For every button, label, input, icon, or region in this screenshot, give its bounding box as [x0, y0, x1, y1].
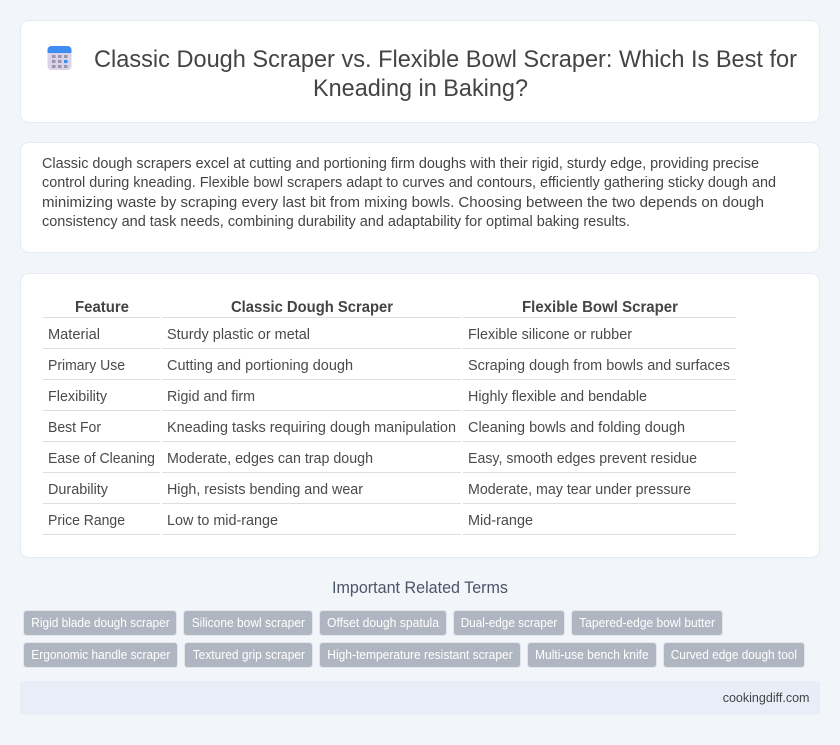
- tags: related terms: High-temperature resistant scraper: [327, 648, 513, 662]
- row: material: Sturdy plastic or metal: [167, 327, 310, 343]
- row: material: Flexible silicone or rubber: [468, 327, 632, 343]
- footer: [20, 681, 820, 714]
- text block: summary: consistency and task needs, combining durability and adaptability for optimal baking results.: [42, 214, 630, 230]
- tags: related terms: Dual-edge scraper: [461, 616, 557, 630]
- tags: related terms: Offset dough spatula: [327, 616, 439, 630]
- row: best for: Best For: [48, 420, 101, 436]
- panel: comparison table: [20, 274, 820, 558]
- row: durability: Durability: [48, 482, 109, 498]
- title: [94, 46, 797, 102]
- row: material: Material: [48, 327, 100, 343]
- row: flexibility: [48, 389, 647, 405]
- tags: related terms: Curved edge dough tool: [671, 648, 797, 662]
- row: flexibility: Flexibility: [48, 389, 108, 405]
- heading: related terms: Important Related Terms: [332, 579, 508, 597]
- row: durability: High, resists bending and wear: [167, 482, 363, 498]
- tags: related terms: Tapered-edge bowl butter: [579, 616, 715, 630]
- icon: calendar: [48, 46, 72, 70]
- row: ease of cleaning: Ease of Cleaning: [48, 451, 155, 467]
- row: primary use: [48, 358, 730, 374]
- row: primary use: Cutting and portioning dough: [167, 358, 353, 374]
- row: primary use: Primary Use: [48, 358, 125, 374]
- row: ease of cleaning: [48, 451, 697, 467]
- tags: related terms: Multi-use bench knife: [535, 648, 649, 662]
- table header: Feature: [75, 299, 129, 316]
- row: flexibility: Highly flexible and bendable: [468, 389, 647, 405]
- tags: related terms: Rigid blade dough scraper: [31, 616, 170, 630]
- panel: title card: [20, 20, 820, 122]
- table header: [75, 299, 678, 316]
- row: price range: Low to mid-range: [167, 513, 278, 529]
- tags: related terms: Textured grip scraper: [193, 648, 305, 662]
- text block: summary: minimizing waste by scraping every last bit from mixing bowls. Choosing between the two depends on dough: [42, 195, 764, 211]
- row: price range: [48, 513, 533, 529]
- row: ease of cleaning: Easy, smooth edges prevent residue: [468, 451, 697, 467]
- row: primary use: Scraping dough from bowls and surfaces: [468, 358, 730, 374]
- row: best for: [48, 420, 685, 436]
- row: price range: Mid-range: [468, 513, 533, 529]
- text block: summary: control during kneading. Flexible bowl scrapers adapt to curves and contours, efficiently gathering sticky dough and: [42, 175, 776, 191]
- tags: related terms: [24, 610, 804, 668]
- text block: summary: Classic dough scrapers excel at cutting and portioning firm doughs with their rigid, sturdy edge, providing precise: [42, 156, 759, 172]
- row: price range: Price Range: [48, 513, 125, 529]
- panel: summary paragraph: [20, 142, 820, 252]
- table header: Classic Dough Scraper: [231, 299, 393, 316]
- row: best for: Kneading tasks requiring dough manipulation: [167, 420, 456, 436]
- row: flexibility: Rigid and firm: [167, 389, 255, 405]
- row: ease of cleaning: Moderate, edges can trap dough: [167, 451, 373, 467]
- row: best for: Cleaning bowls and folding dough: [468, 420, 685, 436]
- tags: related terms: Silicone bowl scraper: [192, 616, 305, 630]
- row: durability: Moderate, may tear under pressure: [468, 482, 691, 498]
- table header: Flexible Bowl Scraper: [522, 299, 678, 316]
- footer: cookingdiff.com: [723, 691, 810, 705]
- text block: summary: [42, 156, 776, 230]
- title: Classic Dough Scraper vs. Flexible Bowl Scraper: Which Is Best for: [94, 46, 797, 73]
- row: durability: [48, 482, 691, 498]
- title: Kneading in Baking?: [313, 75, 528, 102]
- tags: related terms: Ergonomic handle scraper: [31, 648, 170, 662]
- row: material: [48, 327, 632, 343]
